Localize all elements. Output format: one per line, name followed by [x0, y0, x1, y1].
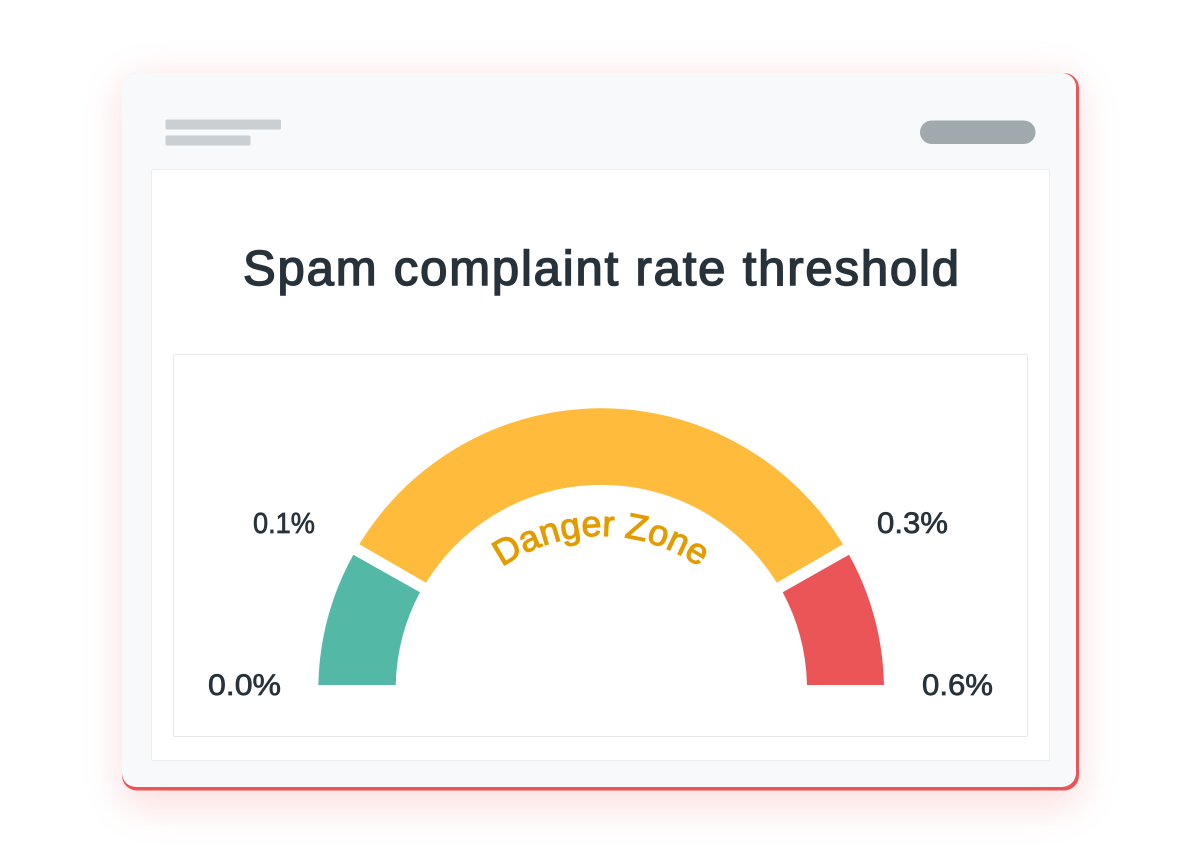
scale label 0.1%: 0.1%: [253, 508, 315, 540]
scale label 0.6%: 0.6%: [922, 669, 993, 702]
header placeholder button: [920, 120, 1036, 144]
scale label 0.0%: 0.0%: [208, 669, 281, 702]
gauge label: danger zone: Danger Zone: [491, 512, 706, 566]
header placeholder text lines: [166, 120, 281, 146]
inner white panel: [152, 170, 1050, 760]
title: Spam complaint rate threshold: [243, 242, 959, 296]
card with red edge: [122, 73, 1079, 790]
gauge segment: red over limit: [783, 555, 884, 685]
gauge: [318, 408, 884, 685]
scale label 0.3%: 0.3%: [877, 507, 948, 540]
gauge label: danger zone: [491, 512, 706, 566]
gauge segment: yellow danger zone: [359, 408, 843, 583]
card shadow: [122, 80, 1079, 805]
chart panel: [174, 354, 1028, 736]
gauge segment: green safe range: [318, 555, 420, 685]
